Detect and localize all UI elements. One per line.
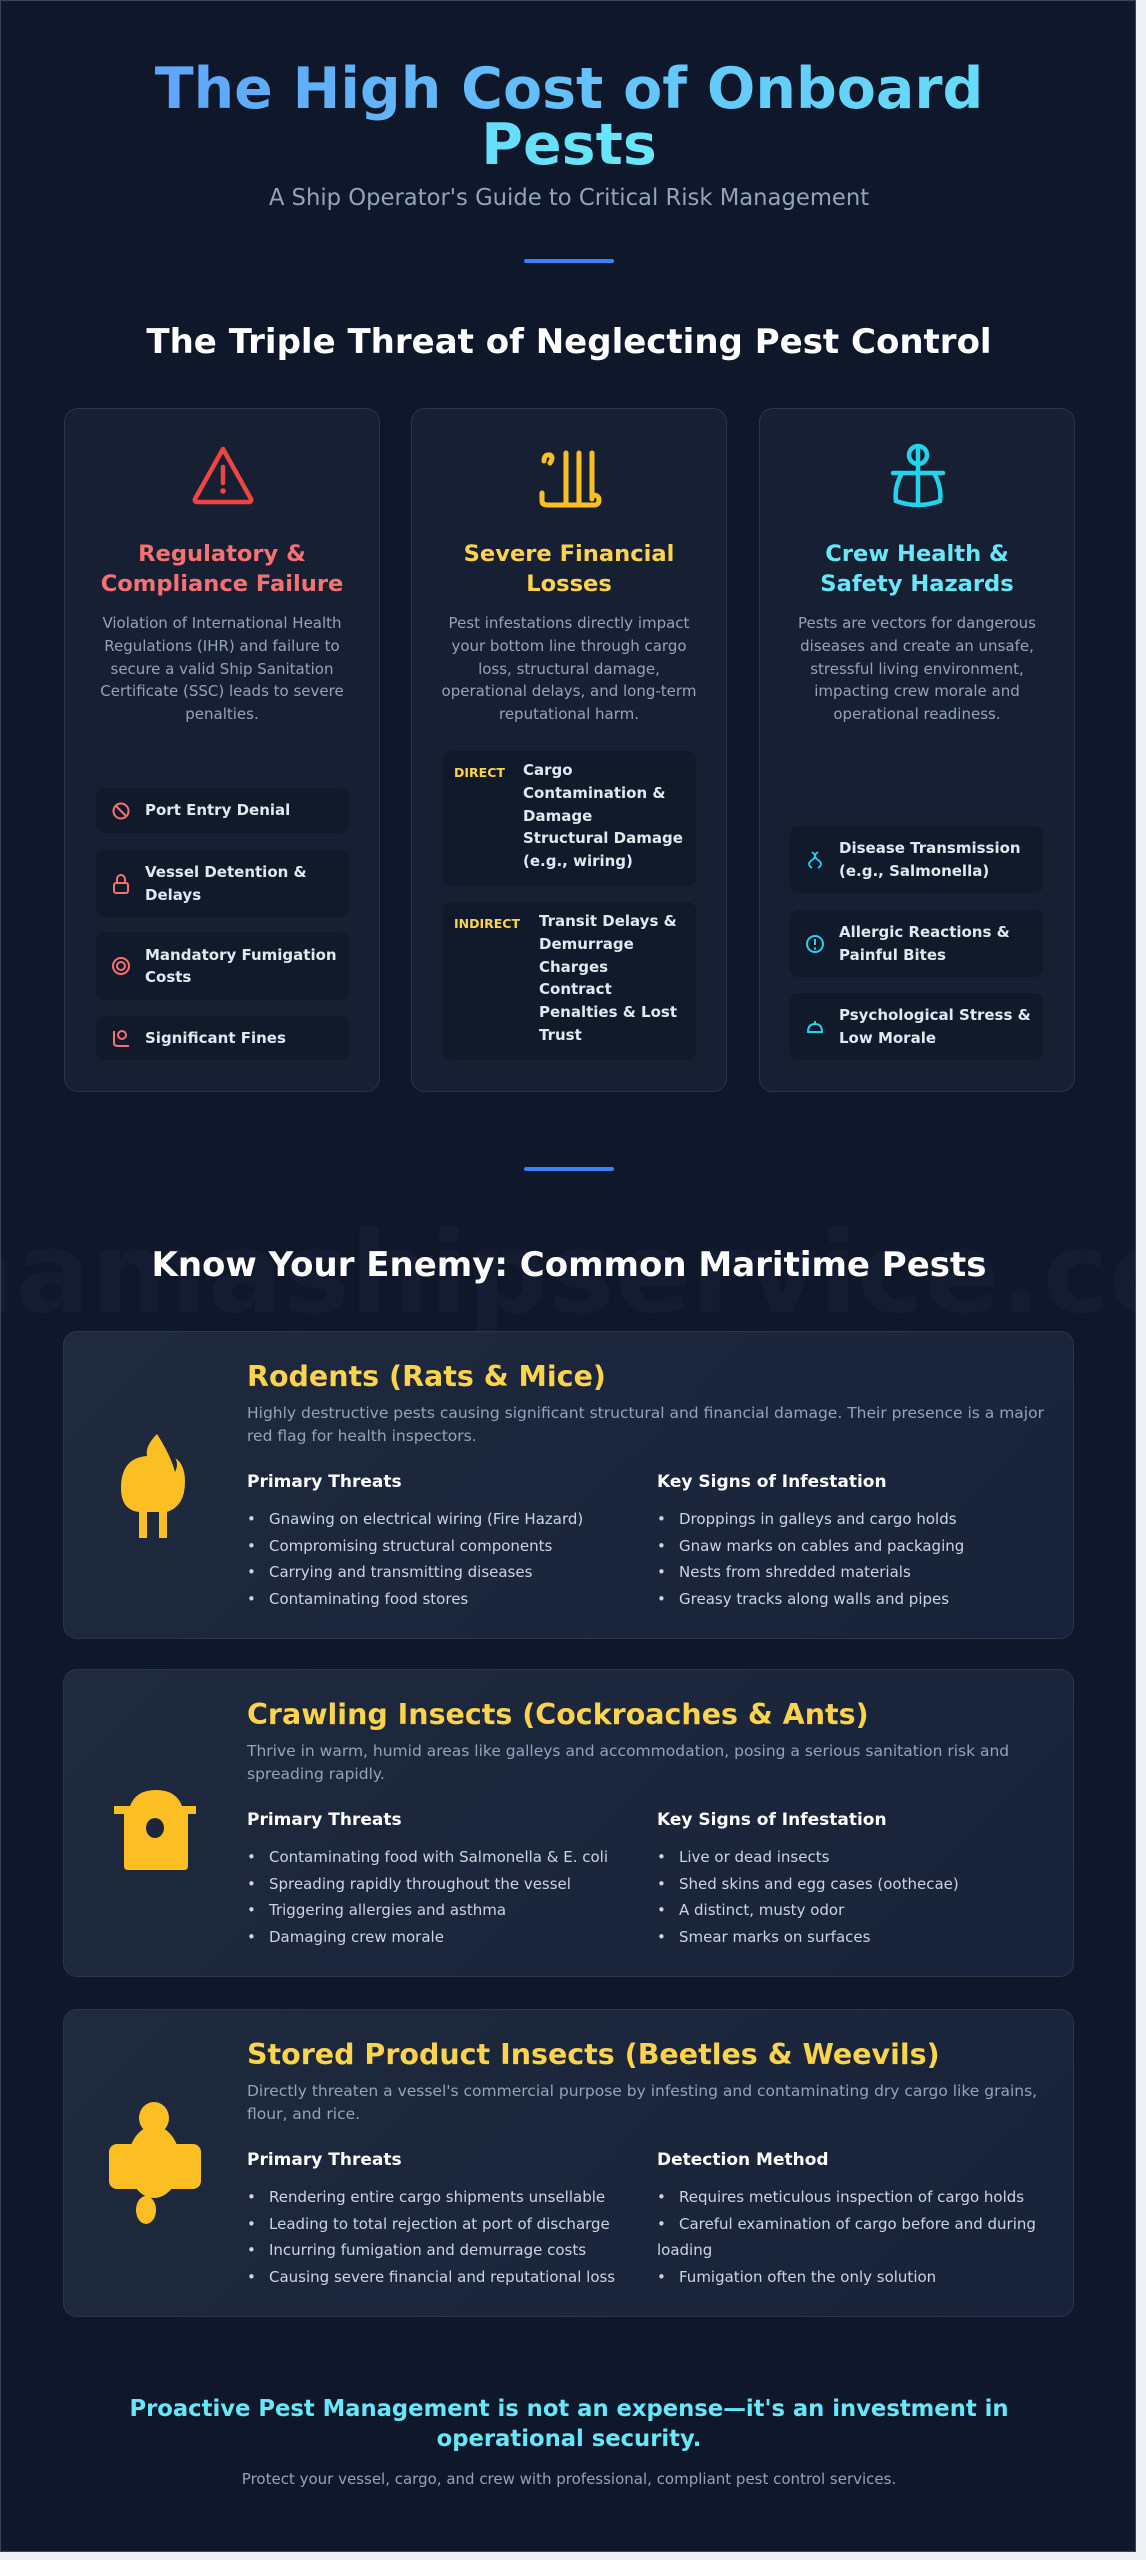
description: Pests are vectors for dangerous diseases and create an unsafe, stressful living environment, impacting crew morale and operational readiness.: [798, 614, 1036, 723]
description: Highly destructive pests causing significant structural and financial damage. Their presence is a major red flag for health inspectors.: [247, 1404, 1044, 1445]
column: signs: [657, 1472, 964, 1608]
item: detention: Delays: [145, 886, 201, 904]
column: threats: Leading to total rejection at port of discharge: [269, 2214, 610, 2232]
title: Stored Product Insects (Beetles & Weevils): [247, 2038, 940, 2071]
title: Regulatory &: [138, 541, 306, 567]
callout: conclusion: Proactive Pest Management is not an expense—it's an investment in operational security.: [129, 2396, 1009, 2452]
column: signs: Greasy tracks along walls and pipes: [679, 1590, 949, 1608]
item: port entry: [96, 788, 349, 833]
column: threats: Rendering entire cargo shipments unsellable: [269, 2188, 605, 2206]
column: threats: Triggering allergies and asthma: [269, 1901, 506, 1919]
icon: warning triangle: [192, 446, 254, 504]
box: indirect: Transit Delays & Demurrage Charges: [539, 912, 677, 976]
panel: rodents: [63, 1331, 1074, 1639]
column: threats: Causing severe financial and reputational loss: [269, 2268, 615, 2286]
heading: triple threat: The Triple Threat of Neglecting Pest Control: [146, 322, 992, 362]
title: Severe Financial: [464, 541, 674, 567]
title: [101, 541, 343, 597]
column: signs: Nests from shredded materials: [679, 1563, 911, 1581]
icon: person: [890, 444, 946, 508]
column: threats: [247, 1810, 608, 1946]
column: signs: Live or dead insects: [679, 1848, 829, 1866]
box: direct: Structural Damage (e.g., wiring): [523, 829, 683, 870]
column: detection: [657, 2150, 1036, 2286]
icon: rodent: [121, 1434, 185, 1538]
column: signs: Smear marks on surfaces: [679, 1928, 870, 1946]
icon: beetle: [109, 2102, 201, 2224]
item: stress: Low Morale: [839, 1028, 936, 1046]
item: stress: Psychological Stress &: [839, 1006, 1031, 1024]
box: direct: [443, 751, 696, 886]
column: threats: Primary Threats: [247, 2150, 402, 2170]
panel: crawling insects: [63, 1669, 1074, 1977]
column: threats: [247, 1472, 583, 1608]
title: Crew Health &: [825, 541, 1009, 567]
item: stress: [790, 993, 1043, 1060]
column: signs: Shed skins and egg cases (oothecae): [679, 1874, 959, 1892]
column: threats: Carrying and transmitting diseases: [269, 1563, 532, 1581]
icon: money: [540, 450, 602, 508]
box: direct: DIRECT: [454, 765, 505, 780]
item: fines: Significant Fines: [145, 1029, 286, 1047]
column: signs: [657, 1810, 959, 1946]
column: signs: Droppings in galleys and cargo holds: [679, 1510, 957, 1528]
item: fines: [96, 1016, 349, 1060]
description: Thrive in warm, humid areas like galleys and accommodation, posing a serious sanitation risk and spreading rapidly.: [247, 1742, 1009, 1783]
item: allergic: Painful Bites: [839, 946, 946, 964]
panel: financial: [411, 408, 727, 1092]
item: disease: Disease Transmission: [839, 839, 1021, 857]
item: fumigation: Costs: [145, 968, 191, 986]
subtitle: A Ship Operator's Guide to Critical Risk Management: [269, 185, 869, 211]
column: threats: Primary Threats: [247, 1472, 402, 1492]
column: threats: Primary Threats: [247, 1810, 402, 1830]
title: [155, 56, 983, 178]
column: signs: Key Signs of Infestation: [657, 1472, 887, 1492]
column: threats: Contaminating food with Salmonella & E. coli: [269, 1848, 608, 1866]
description: Violation of International Health Regulations (IHR) and failure to secure a valid Ship Sanitation Certificate (SSC) leads to severe penalties.: [100, 614, 344, 723]
box: direct: Cargo Contamination & Damage: [523, 761, 665, 825]
column: detection: Careful examination of cargo before and during loading: [657, 2214, 1036, 2259]
box: indirect: INDIRECT: [454, 916, 520, 931]
column: detection: Detection Method: [657, 2150, 829, 2170]
column: detection: Requires meticulous inspection of cargo holds: [679, 2188, 1024, 2206]
icon: cockroach: [114, 1790, 196, 1870]
column: threats: [247, 2150, 615, 2286]
column: detection: Fumigation often the only solution: [679, 2268, 936, 2286]
box: indirect: Contract Penalties & Lost Trust: [539, 980, 677, 1044]
panel: crew health: [759, 408, 1075, 1092]
heading: know your enemy: Know Your Enemy: Common Maritime Pests: [151, 1245, 987, 1285]
title: Compliance Failure: [101, 571, 343, 597]
panel: regulatory: [64, 408, 380, 1092]
title: Losses: [526, 571, 612, 597]
title: [464, 541, 674, 597]
column: threats: Spreading rapidly throughout the vessel: [269, 1874, 571, 1892]
item: disease: (e.g., Salmonella): [839, 862, 989, 880]
title: Pests: [481, 112, 657, 178]
item: detention: [96, 850, 349, 917]
text: footer: Protect your vessel, cargo, and crew with professional, compliant pest control services.: [242, 2470, 896, 2488]
description: Pest infestations directly impact your bottom line through cargo loss, structural damage, operational delays, and long-term reputational harm.: [442, 614, 696, 723]
title: Crawling Insects (Cockroaches & Ants): [247, 1698, 869, 1731]
description: Directly threaten a vessel's commercial purpose by infesting and contaminating dry cargo like grains, flour, and rice.: [247, 2082, 1037, 2123]
column: signs: Gnaw marks on cables and packaging: [679, 1536, 964, 1554]
column: signs: A distinct, musty odor: [679, 1901, 844, 1919]
title: Safety Hazards: [820, 571, 1014, 597]
title: Rodents (Rats & Mice): [247, 1360, 606, 1393]
column: threats: Gnawing on electrical wiring (Fire Hazard): [269, 1510, 583, 1528]
title: [820, 541, 1014, 597]
item: allergic: Allergic Reactions &: [839, 923, 1010, 941]
item: disease: [790, 826, 1043, 893]
box: indirect: [443, 902, 696, 1060]
item: allergic: [790, 910, 1043, 977]
column: threats: Compromising structural components: [269, 1536, 552, 1554]
column: signs: Key Signs of Infestation: [657, 1810, 887, 1830]
title: The High Cost of Onboard: [155, 56, 983, 122]
item: fumigation: Mandatory Fumigation: [145, 946, 337, 964]
panel: stored product insects: [63, 2009, 1074, 2317]
item: port entry: Port Entry Denial: [145, 801, 290, 819]
column: threats: Contaminating food stores: [269, 1590, 468, 1608]
item: detention: Vessel Detention &: [145, 863, 307, 881]
column: threats: Incurring fumigation and demurrage costs: [269, 2241, 586, 2259]
item: fumigation: [96, 932, 349, 1000]
column: threats: Damaging crew morale: [269, 1928, 444, 1946]
